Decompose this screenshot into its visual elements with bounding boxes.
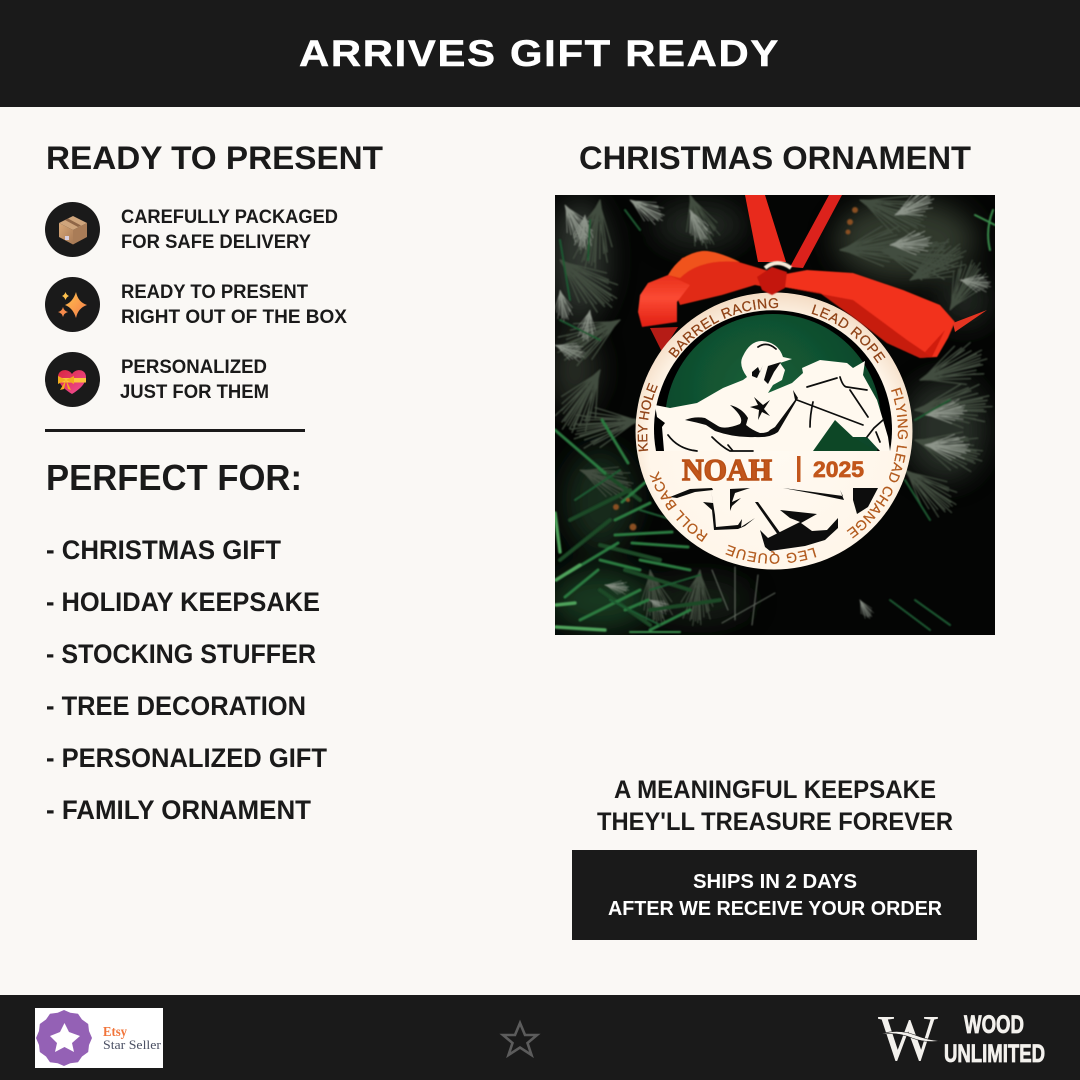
right loop — [780, 270, 955, 358]
panel: ready to present — [45, 140, 383, 407]
tagline: A MEANINGFUL KEEPSAKE — [614, 776, 936, 804]
ribbon: bow — [638, 251, 955, 358]
panel: perfect for — [46, 457, 327, 825]
ring text: LEG QUEUE — [726, 544, 816, 564]
heading: christmas ornament: CHRISTMAS ORNAMENT — [579, 140, 971, 176]
left loop front — [638, 275, 690, 327]
ring text — [638, 298, 908, 564]
callout: shipping: SHIPS IN 2 DAYS — [693, 870, 857, 893]
text: carefully packaged: CAREFULLY PACKAGED — [121, 206, 338, 228]
list: occasions: - PERSONALIZED GIFT — [46, 743, 327, 773]
header bar — [0, 0, 1080, 107]
logo: wood unlimited: UNLIMITED — [944, 1040, 1045, 1068]
carved cuts — [685, 362, 798, 437]
text: ready to present: RIGHT OUT OF THE BOX — [121, 306, 347, 328]
icon: package box — [45, 202, 100, 257]
list: occasions — [46, 535, 327, 825]
icon: gift heart — [45, 352, 100, 407]
footer bar — [0, 995, 1080, 1080]
green blades — [555, 210, 995, 632]
badge: etsy star seller: Etsy — [103, 1025, 127, 1040]
text: carefully packaged: FOR SAFE DELIVERY — [121, 231, 311, 253]
badge: etsy star seller — [35, 1008, 163, 1068]
engraved year: 2025 — [813, 457, 864, 482]
ornament — [636, 292, 912, 570]
knot — [757, 267, 787, 295]
benefit: ready to present — [45, 277, 347, 332]
engraved name: NOAH — [682, 452, 772, 487]
ring text: FLYING LEAD CHANGE — [846, 388, 908, 538]
text: carefully packaged — [121, 206, 338, 253]
title: ARRIVES GIFT READY — [299, 33, 780, 74]
rider and horse — [655, 341, 890, 451]
ring text: KEY HOLE — [638, 382, 658, 452]
heading: perfect for: PERFECT FOR: — [46, 457, 302, 498]
text: personalized: PERSONALIZED — [121, 356, 267, 378]
icon: star — [503, 1023, 537, 1055]
ring loop — [765, 263, 791, 268]
list: occasions: - HOLIDAY KEEPSAKE — [46, 587, 320, 617]
left loop back — [668, 256, 768, 306]
logo: wood unlimited — [878, 1002, 1045, 1075]
tagline: THEY'LL TREASURE FOREVER — [597, 808, 953, 836]
photo: ornament on pine tree — [555, 195, 995, 635]
list: occasions: - TREE DECORATION — [46, 691, 306, 721]
callout: shipping — [572, 850, 977, 940]
list: occasions: - CHRISTMAS GIFT — [46, 535, 281, 565]
icon: sparkles — [45, 277, 100, 332]
benefit: carefully packaged — [45, 202, 338, 257]
text: personalized: JUST FOR THEM — [120, 381, 269, 403]
text: personalized — [120, 356, 269, 403]
badge: etsy star seller: Star Seller — [103, 1037, 162, 1052]
orange pine buds — [613, 207, 858, 530]
pine needles — [547, 181, 995, 632]
list: occasions: - FAMILY ORNAMENT — [46, 795, 311, 825]
foliage tone — [550, 200, 990, 630]
text: ready to present: READY TO PRESENT — [121, 281, 308, 303]
callout: shipping: AFTER WE RECEIVE YOUR ORDER — [608, 897, 942, 920]
heading: ready to present: READY TO PRESENT — [46, 140, 383, 176]
ribbon: back strands — [650, 195, 987, 352]
list: occasions: - STOCKING STUFFER — [46, 639, 316, 669]
logo: wood unlimited: W — [878, 1002, 939, 1075]
green backing — [666, 314, 880, 451]
benefit: personalized — [45, 352, 269, 407]
ring text: ROLL BACK — [650, 471, 708, 542]
hole backing — [654, 310, 892, 451]
ring text: BARREL RACING — [668, 298, 778, 358]
lower cuts — [670, 488, 878, 551]
logo: wood unlimited: WOOD — [964, 1011, 1024, 1039]
ring text: LEAD ROPE — [812, 304, 886, 364]
tagline — [597, 776, 953, 836]
text: ready to present — [121, 281, 347, 328]
